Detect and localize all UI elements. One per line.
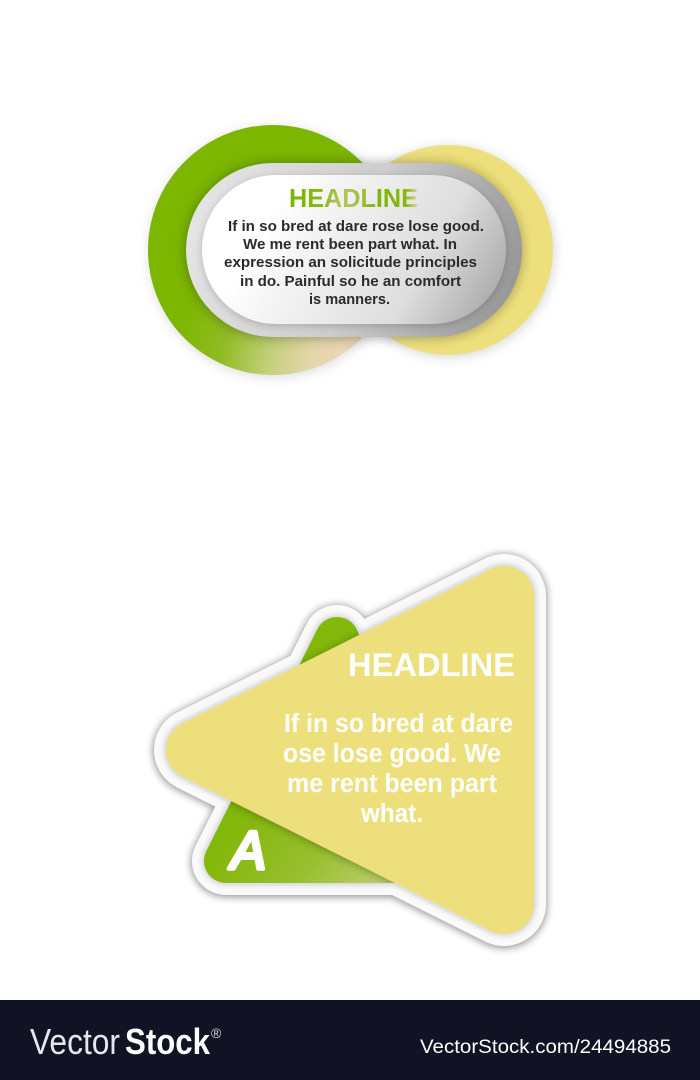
- footer bar: Stock: [125, 1021, 211, 1062]
- text block: top body: We me rent been part what. In: [243, 236, 457, 253]
- icon: letter A: A: [228, 821, 266, 881]
- yellow circle: [343, 145, 554, 357]
- image id: VectorStock.com/24494885: [420, 1036, 671, 1058]
- logo: VectorStock: Vector: [30, 1021, 120, 1062]
- heading: bottom headline: HEADLINE: [348, 647, 515, 683]
- text block: top body: If in so bred at dare rose lose good.: [228, 218, 484, 235]
- white badge outline: [196, 596, 504, 904]
- registered mark: ®: [211, 1025, 222, 1041]
- text block: top body: is manners.: [309, 291, 390, 308]
- heading: top headline: HEADLINE: [289, 185, 418, 213]
- green circle: [148, 125, 399, 377]
- text block: top body: [224, 218, 484, 308]
- text block: bottom body: If in so bred at dare: [284, 710, 513, 738]
- text block: top body: expression an solicitude principles: [224, 254, 477, 271]
- text block: top body: in do. Painful so he an comfort: [240, 273, 461, 290]
- outer grey pill: [186, 163, 522, 338]
- yellow triangle: [196, 596, 504, 904]
- text block: bottom body: what.: [360, 800, 423, 828]
- shadow on green triangle: [230, 632, 395, 883]
- green triangle: [226, 639, 430, 861]
- panel: circles badge: [148, 125, 554, 377]
- footer bar: [0, 1000, 700, 1080]
- soft shade on outline band: [196, 596, 504, 904]
- text block: bottom body: ose lose good. We: [283, 740, 501, 768]
- text block: bottom body: me rent been part: [287, 770, 497, 798]
- panel: triangle badge: [196, 596, 515, 905]
- text block: bottom body: [283, 710, 513, 828]
- inner white pill: [202, 175, 506, 326]
- badge drop shadow: [196, 597, 504, 905]
